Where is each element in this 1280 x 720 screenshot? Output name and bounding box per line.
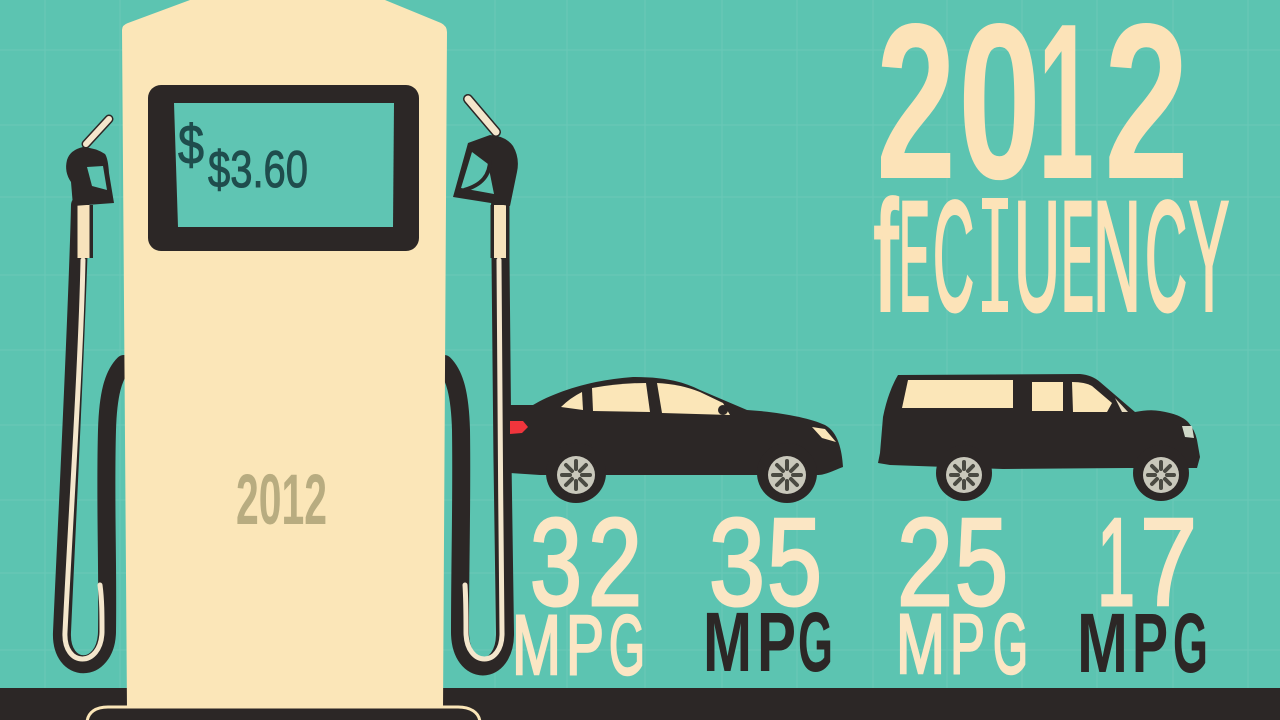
right fuel hose and nozzle xyxy=(444,99,518,666)
pump base xyxy=(87,707,480,720)
17 mpg: 1 xyxy=(1097,494,1135,632)
left nozzle body xyxy=(66,147,114,206)
17 mpg: P xyxy=(1132,596,1168,690)
title word: E xyxy=(1061,170,1094,344)
van wing window xyxy=(1115,398,1128,412)
35 mpg: G xyxy=(798,595,833,689)
sedan rear window xyxy=(561,392,583,410)
ground bar xyxy=(0,688,1280,720)
title word: C xyxy=(933,170,974,344)
35 mpg: M xyxy=(703,595,752,689)
sedan front wheel xyxy=(757,443,817,503)
van rear window xyxy=(902,380,1013,408)
32 mpg: 3 xyxy=(530,494,582,632)
van rear wheel xyxy=(936,445,992,501)
25 mpg: 2 xyxy=(897,494,953,632)
35 mpg: P xyxy=(757,595,796,689)
pump display xyxy=(148,85,419,251)
sedan middle window xyxy=(592,383,650,412)
32 mpg xyxy=(512,494,645,692)
25 mpg xyxy=(896,494,1028,691)
sedan body xyxy=(510,377,843,475)
25 mpg: M xyxy=(896,597,945,691)
dollar sign: $ xyxy=(178,113,204,176)
left nozzle spout xyxy=(86,119,109,144)
pump year label: 2012 xyxy=(236,461,327,540)
32 mpg: M xyxy=(512,598,561,692)
25 mpg: G xyxy=(993,597,1028,691)
sedan headlight xyxy=(812,427,836,442)
sedan rear wheel xyxy=(546,443,606,503)
35 mpg: 5 xyxy=(767,494,822,632)
sedan car xyxy=(510,377,843,503)
17 mpg: 7 xyxy=(1140,494,1197,632)
price: $3.60 xyxy=(208,141,308,199)
17 mpg xyxy=(1077,494,1208,690)
25 mpg: P xyxy=(950,597,985,691)
25 mpg: 5 xyxy=(955,494,1008,632)
title word: N xyxy=(1093,170,1141,344)
right nozzle spout xyxy=(468,99,496,132)
title word: E xyxy=(899,170,930,344)
right nozzle guard xyxy=(461,152,494,194)
35 mpg: 3 xyxy=(709,494,765,632)
display screen xyxy=(174,103,394,227)
17 mpg: M xyxy=(1077,596,1128,690)
title word: U xyxy=(1014,170,1060,344)
van middle window xyxy=(1032,382,1063,411)
van front window xyxy=(1072,382,1112,412)
van xyxy=(878,374,1200,501)
17 mpg: G xyxy=(1173,596,1208,690)
left fuel hose and nozzle xyxy=(62,119,124,664)
fuel pump body xyxy=(122,0,447,710)
right nozzle body xyxy=(453,135,518,206)
van front wheel xyxy=(1133,445,1189,501)
32 mpg: P xyxy=(566,598,604,692)
title word: C xyxy=(1145,170,1187,344)
van headlight xyxy=(1182,426,1194,438)
mpg figures xyxy=(512,494,1208,692)
sedan front window xyxy=(657,383,730,415)
van body xyxy=(878,374,1200,469)
32 mpg: G xyxy=(609,598,645,692)
left nozzle guard xyxy=(87,166,107,190)
35 mpg xyxy=(703,494,833,689)
32 mpg: 2 xyxy=(588,494,642,632)
right hose xyxy=(444,205,505,666)
display frame xyxy=(148,85,419,251)
title word xyxy=(874,170,1229,344)
sedan mirror xyxy=(718,405,728,415)
title word: I xyxy=(987,170,1003,344)
left hose xyxy=(62,205,124,664)
sedan tail light xyxy=(510,421,528,434)
title word: f xyxy=(874,170,898,344)
